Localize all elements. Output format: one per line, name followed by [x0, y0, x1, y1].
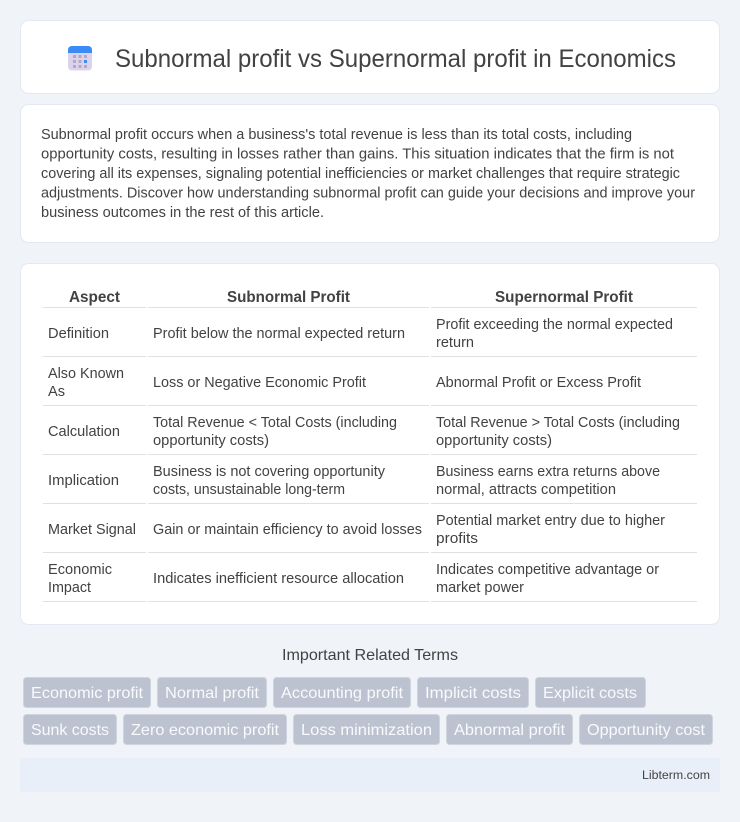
- table row: calculation: [48, 415, 680, 449]
- table row: implication: [48, 464, 660, 498]
- table row: calculation: opportunity costs): [436, 433, 552, 449]
- footer: [20, 758, 720, 792]
- table row: also known as: [48, 366, 641, 400]
- tags: related terms: Implicit costs: [425, 685, 521, 702]
- tags: related terms: Zero economic profit: [131, 722, 280, 739]
- tags: related terms: Abnormal profit: [454, 722, 566, 739]
- table row: market signal: profits: [436, 531, 478, 547]
- table row: calculation: Calculation: [48, 424, 120, 440]
- table row: definition: Definition: [48, 326, 109, 342]
- table row: calculation: Total Revenue > Total Costs (including: [436, 415, 680, 431]
- tags: related terms: Accounting profit: [281, 685, 404, 702]
- table row: implication: Implication: [48, 473, 119, 489]
- table header row: Supernormal Profit: [495, 289, 633, 306]
- table row: calculation: Total Revenue < Total Costs (including: [153, 415, 397, 431]
- footer: Libterm.com: [642, 768, 710, 782]
- table row: also known as: Also Known: [48, 366, 124, 382]
- table row: implication: costs, unsustainable long-term: [153, 482, 345, 498]
- panel: header: [20, 20, 720, 94]
- text block: introduction: adjustments. Discover how understanding subnormal profit can guide your decisions and improve your: [41, 186, 695, 202]
- table row: economic impact: Indicates competitive advantage or: [436, 562, 659, 578]
- table row: also known as: As: [48, 384, 65, 400]
- table row: calculation: opportunity costs): [153, 433, 269, 449]
- text block: introduction: business outcomes in the rest of this article.: [41, 205, 324, 221]
- text block: introduction: opportunity costs, resulting in losses rather than gains. This situation indicates that the firm is not: [41, 146, 674, 162]
- heading: important related terms: Important Related Terms: [282, 647, 458, 664]
- tags: related terms: Normal profit: [165, 685, 260, 702]
- table row: economic impact: market power: [436, 580, 524, 596]
- tags: related terms: Loss minimization: [301, 722, 432, 739]
- table row: definition: return: [436, 335, 474, 351]
- table row: market signal: [48, 513, 665, 547]
- table row: market signal: Potential market entry due to higher: [436, 513, 665, 529]
- table row: also known as: Loss or Negative Economic Profit: [153, 375, 366, 391]
- table row: implication: Business is not covering opportunity: [153, 464, 386, 480]
- tags: related terms: Explicit costs: [543, 685, 637, 702]
- table header row: Subnormal Profit: [227, 289, 350, 306]
- text block: introduction: covering all its expenses, signaling potential inefficiencies or market challenges that require strategic: [41, 166, 680, 182]
- tags: related terms: [24, 678, 712, 744]
- table row: implication: Business earns extra returns above: [436, 464, 660, 480]
- tags: related terms: Sunk costs: [31, 722, 109, 739]
- tags: related terms: Economic profit: [31, 685, 144, 702]
- table row: market signal: Market Signal: [48, 522, 136, 538]
- table row: definition: Profit below the normal expected return: [153, 326, 405, 342]
- table header row: Aspect: [69, 289, 120, 306]
- table row: market signal: Gain or maintain efficiency to avoid losses: [153, 522, 422, 538]
- text block: introduction: [41, 127, 695, 221]
- text block: introduction: Subnormal profit occurs when a business's total revenue is less than its total costs, including: [41, 127, 632, 143]
- table row: definition: Profit exceeding the normal expected: [436, 317, 673, 333]
- table row: economic impact: [48, 562, 659, 596]
- icon: calendar: [68, 46, 92, 70]
- panel: introduction: [20, 104, 720, 242]
- title: Subnormal profit vs Supernormal profit in Economics: [115, 46, 676, 73]
- table row: also known as: Abnormal Profit or Excess Profit: [436, 375, 641, 391]
- table row: economic impact: Economic: [48, 562, 112, 578]
- table row: economic impact: Impact: [48, 580, 91, 596]
- table row: definition: [48, 317, 673, 351]
- panel: comparison table: [20, 264, 720, 624]
- table row: economic impact: Indicates inefficient resource allocation: [153, 571, 404, 587]
- tags: related terms: Opportunity cost: [587, 722, 706, 739]
- table header row: [69, 289, 633, 306]
- table row: implication: normal, attracts competition: [436, 482, 616, 498]
